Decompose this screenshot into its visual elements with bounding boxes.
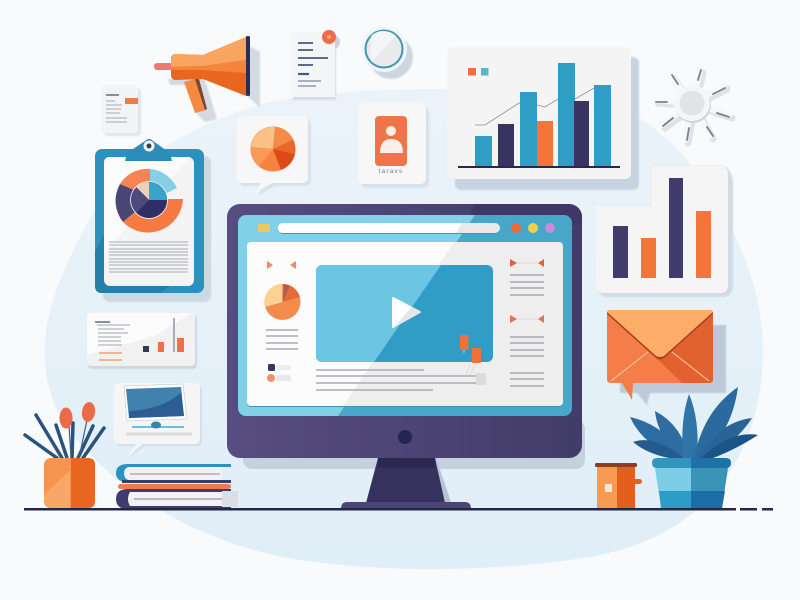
address bar (278, 223, 500, 234)
panel: bar and line chart card (447, 47, 639, 190)
flowers (60, 401, 96, 428)
icon: round badge (361, 26, 413, 79)
donut chart (116, 169, 183, 233)
screen (238, 215, 572, 416)
line trend (475, 88, 594, 125)
icon: envelope (607, 310, 726, 405)
icon: document with badge (290, 30, 340, 100)
monitor (227, 204, 585, 509)
right column widgets (510, 259, 544, 386)
ground line (24, 508, 773, 510)
icon: orange mug (595, 463, 642, 508)
bars (475, 63, 611, 167)
icon: small note (101, 85, 141, 136)
icon: potted plant (630, 387, 758, 508)
lines below video (316, 370, 486, 390)
icon: plant in orange vase (25, 401, 104, 508)
monitor shadow (243, 420, 585, 469)
browser icon (258, 224, 270, 232)
window buttons (511, 223, 555, 233)
bars (613, 178, 711, 278)
monitor frame (227, 204, 582, 458)
background blob (44, 89, 763, 569)
panel: pie chart speech bubble (237, 116, 311, 196)
play button (393, 298, 420, 327)
panel: clipboard with donut chart (95, 139, 211, 302)
pie chart (250, 126, 296, 172)
pot (652, 458, 731, 508)
orange tags (460, 335, 481, 375)
panel: small report card (87, 313, 197, 369)
left column widgets (264, 261, 300, 382)
panel: bar chart card stepped (596, 166, 733, 297)
monitor stand (341, 458, 471, 509)
profile caption: taravs (379, 168, 403, 175)
panel: laptop speech bubble (114, 383, 202, 459)
icon: stacked books (116, 464, 238, 509)
leaves (630, 387, 758, 462)
icon: megaphone (154, 36, 260, 122)
laptop illustration (124, 384, 192, 434)
web page content (247, 242, 563, 407)
vase (44, 458, 95, 508)
small pie (264, 284, 300, 320)
icon: gear (655, 70, 732, 143)
video player (316, 265, 493, 362)
panel: profile card (358, 103, 429, 188)
